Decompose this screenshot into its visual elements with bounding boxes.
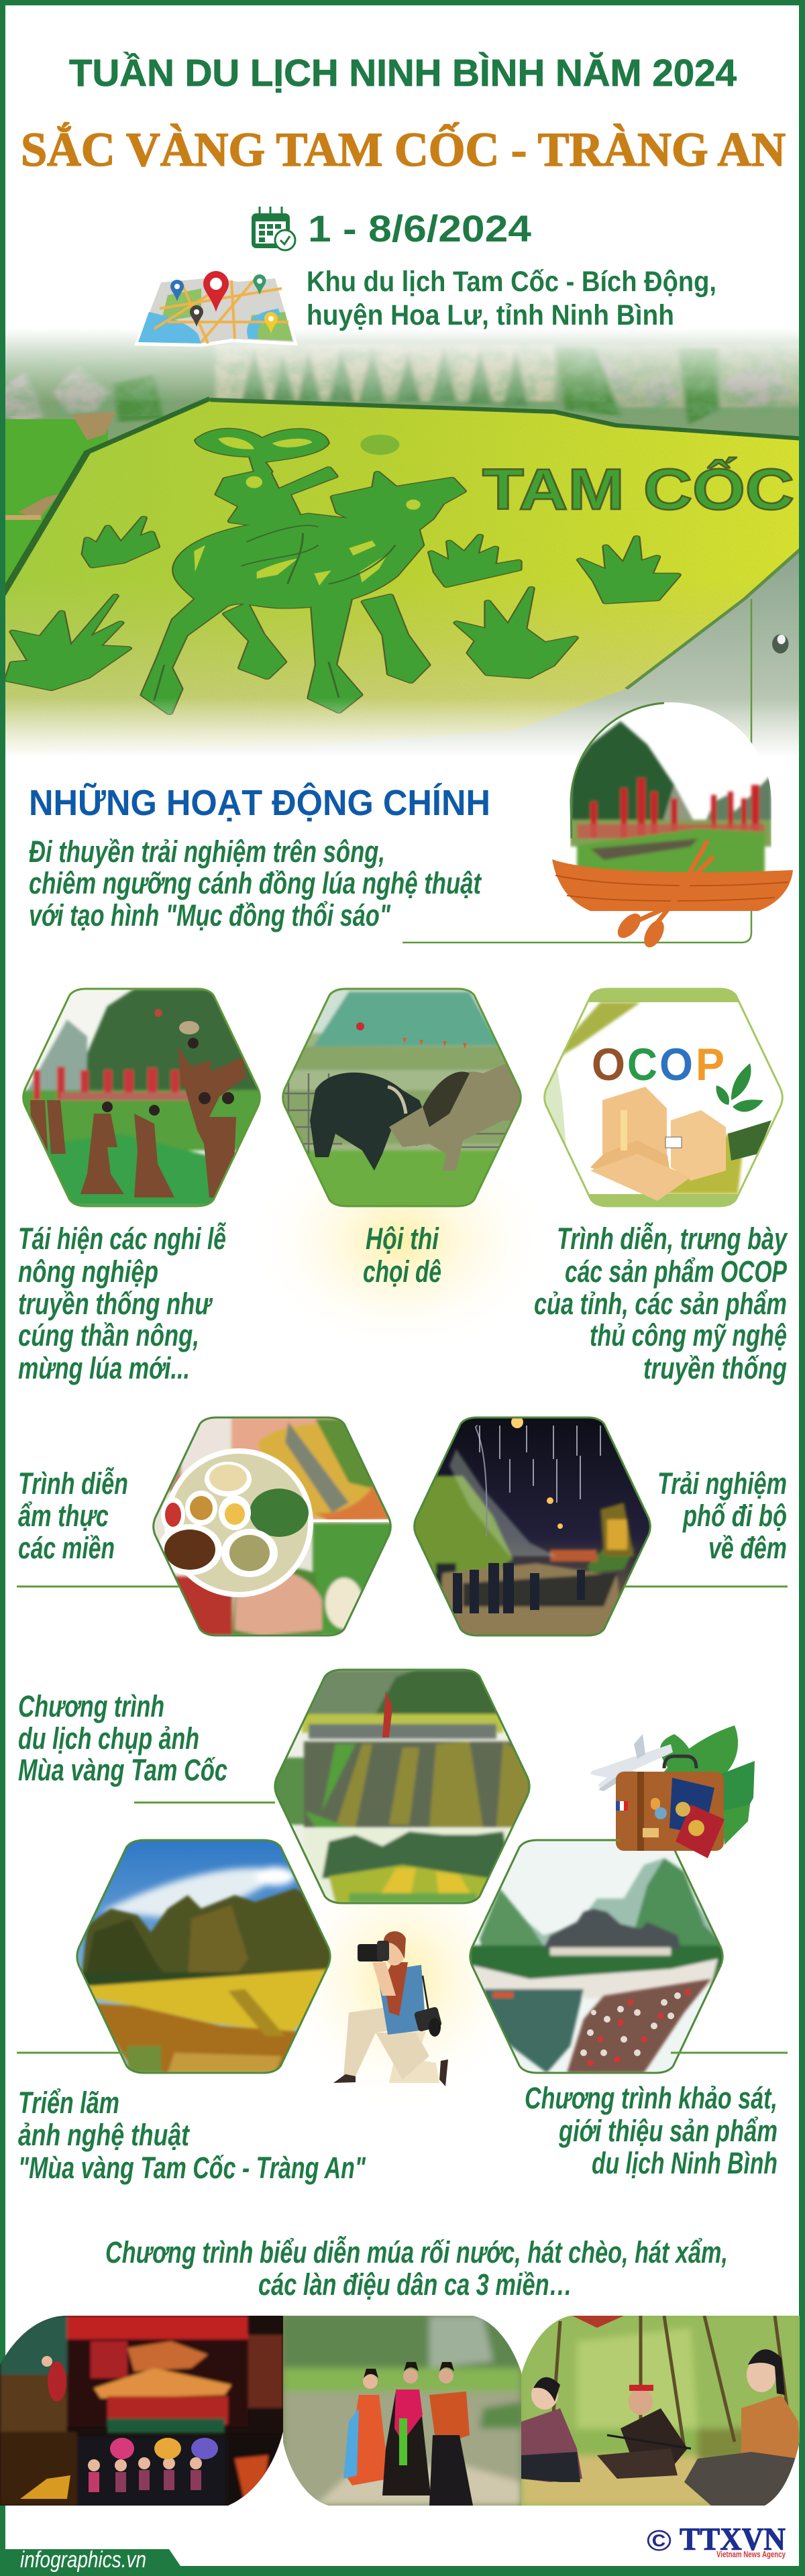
- caption: rituals: nông nghiệp: [18, 1254, 158, 1289]
- hexagon panel: OCOP products: [543, 989, 784, 1206]
- caption: goat fight: chọi dê: [363, 1254, 441, 1289]
- icon: calendar: [252, 207, 295, 250]
- arms: [372, 1962, 396, 1996]
- icon: suitcase with plane, leaves and passports: [590, 1725, 755, 1858]
- caption: photo tour: du lịch chụp ảnh: [18, 1721, 199, 1756]
- field motif: buffalo, flute boy and grass hands: [7, 430, 678, 712]
- date: 1 - 8/6/2024: [308, 207, 531, 250]
- intro text: với tạo hình "Mục đồng thổi sáo": [29, 898, 390, 932]
- fence: [281, 1073, 523, 1154]
- motif light details: [194, 437, 421, 586]
- caption: OCOP: [534, 1222, 788, 1385]
- header block: [21, 51, 786, 347]
- OCOP logo: [592, 1039, 724, 1090]
- caption: rituals: Tái hiện các nghi lễ: [18, 1222, 226, 1256]
- hexagon photo: night walking street: [413, 1416, 652, 1635]
- OCOP logo: O: [659, 1039, 693, 1090]
- photo: cheo singers by the river: [283, 2316, 521, 2506]
- intro text: [29, 835, 482, 932]
- caption: goat fight: Hội thi: [366, 1222, 439, 1256]
- photo: xam singers in bamboo grove: [521, 2316, 800, 2506]
- performers: [30, 1046, 246, 1197]
- hero photo: rice field art: [0, 327, 805, 758]
- plane: [590, 1744, 673, 1790]
- icon: map with pins: [134, 271, 298, 347]
- singer right: [741, 2395, 798, 2469]
- round platter: [164, 1448, 313, 1597]
- river: [130, 553, 799, 750]
- face: [384, 1936, 405, 1966]
- puppets: [20, 2356, 218, 2499]
- musician: [621, 2408, 688, 2469]
- icon: photographer: [333, 1931, 448, 2086]
- hexagon photo: art exhibition landscape: [75, 1840, 332, 2073]
- address: huyện Hoa Lư, tỉnh Ninh Bình: [307, 299, 674, 331]
- near leg: [343, 2007, 402, 2076]
- caption: rituals: mừng lúa mới...: [18, 1351, 190, 1385]
- hexagon photo: regional cuisine: [152, 1417, 392, 1635]
- camera: [358, 1944, 384, 1962]
- hexagon photo: photo tour collage: [273, 1670, 532, 1903]
- caption: art exhibition: ảnh nghệ thuật: [18, 2118, 191, 2152]
- caption: art exhibition: "Mùa vàng Tam Cốc - Tràng An": [18, 2151, 366, 2185]
- green corner rule: [402, 599, 751, 943]
- hexagon photo: Trang An temple and boats: [468, 1840, 724, 2073]
- caption: regional cuisine: các miền: [18, 1531, 115, 1565]
- caption: goat fight: [363, 1222, 441, 1289]
- OCOP logo: O: [592, 1039, 625, 1090]
- side paddy: [5, 419, 108, 584]
- caption: rituals: cúng thần nông,: [18, 1318, 199, 1352]
- caption: folk performances: các làn điệu dân ca 3 miền…: [258, 2267, 572, 2302]
- singer left: [521, 2408, 582, 2482]
- panel: main activities intro: [29, 599, 793, 951]
- caption: photo tour: Chương trình: [18, 1689, 164, 1723]
- hanging camera: [423, 1976, 429, 2016]
- title line 1: TUẦN DU LỊCH NINH BÌNH NĂM 2024: [69, 51, 737, 95]
- singers: [343, 2362, 473, 2506]
- caption: regional cuisine: ẩm thực: [18, 1499, 109, 1533]
- agency wordmark: TTXVN: [680, 2522, 786, 2557]
- caption: rituals: truyền thống như: [18, 1287, 213, 1321]
- foliage mottling: [5, 345, 799, 416]
- OCOP logo: P: [696, 1039, 724, 1090]
- hexagon photo: agricultural ritual: [21, 989, 262, 1206]
- photo: water puppet stage: [0, 2316, 283, 2506]
- caption: photo tour: [18, 1689, 227, 1787]
- address: [307, 266, 716, 331]
- caption: photo tour: Mùa vàng Tam Cốc: [18, 1753, 227, 1787]
- address: Khu du lịch Tam Cốc - Bích Động,: [307, 266, 716, 298]
- intro text: Đi thuyền trải nghiệm trên sông,: [29, 835, 385, 869]
- footer band: [0, 2547, 805, 2576]
- icon: wooden boat with oars: [552, 841, 793, 951]
- cartons: [602, 1087, 667, 1171]
- hexagon photo: goat fight: [281, 989, 523, 1211]
- goat light: [389, 1057, 523, 1171]
- caption: regional cuisine: [18, 1466, 128, 1565]
- intro text: chiêm ngưỡng cánh đồng lúa nghệ thuật: [29, 866, 482, 900]
- copyright mark: ©: [647, 2524, 672, 2557]
- caption: rituals: [18, 1222, 226, 1385]
- goat dark: [310, 1072, 423, 1171]
- caption: folk performances: [105, 2235, 728, 2302]
- logo: TTXVN copyright: [647, 2522, 786, 2559]
- photo fades: [0, 329, 805, 758]
- rice grain: [7, 402, 798, 596]
- caption: regional cuisine: Trình diễn: [18, 1466, 128, 1501]
- far leg: [389, 2031, 439, 2083]
- caption: tourism survey: [525, 2081, 777, 2180]
- heading: NHỮNG HOẠT ĐỘNG CHÍNH: [29, 782, 490, 823]
- glow behind row one: [247, 1127, 555, 1355]
- glow behind photographer: [275, 1845, 530, 2113]
- title line 2: SẮC VÀNG TAM CỐC - TRÀNG AN: [21, 122, 786, 176]
- OCOP logo: C: [627, 1039, 657, 1090]
- footer source: infographics.vn: [20, 2547, 146, 2573]
- field text: TAM CỐC: TAM CỐC: [482, 458, 794, 522]
- hillside foliage and rocks: [5, 333, 799, 441]
- circular boat photo: [570, 702, 771, 883]
- main rice field: [0, 400, 805, 753]
- torso: [377, 1965, 426, 2035]
- boat on river: [772, 635, 789, 653]
- shoes: [333, 2059, 448, 2086]
- caption: night street: [657, 1466, 787, 1565]
- caption: art exhibition: Triển lãm: [18, 2086, 119, 2120]
- caption: art exhibition: [18, 2086, 366, 2185]
